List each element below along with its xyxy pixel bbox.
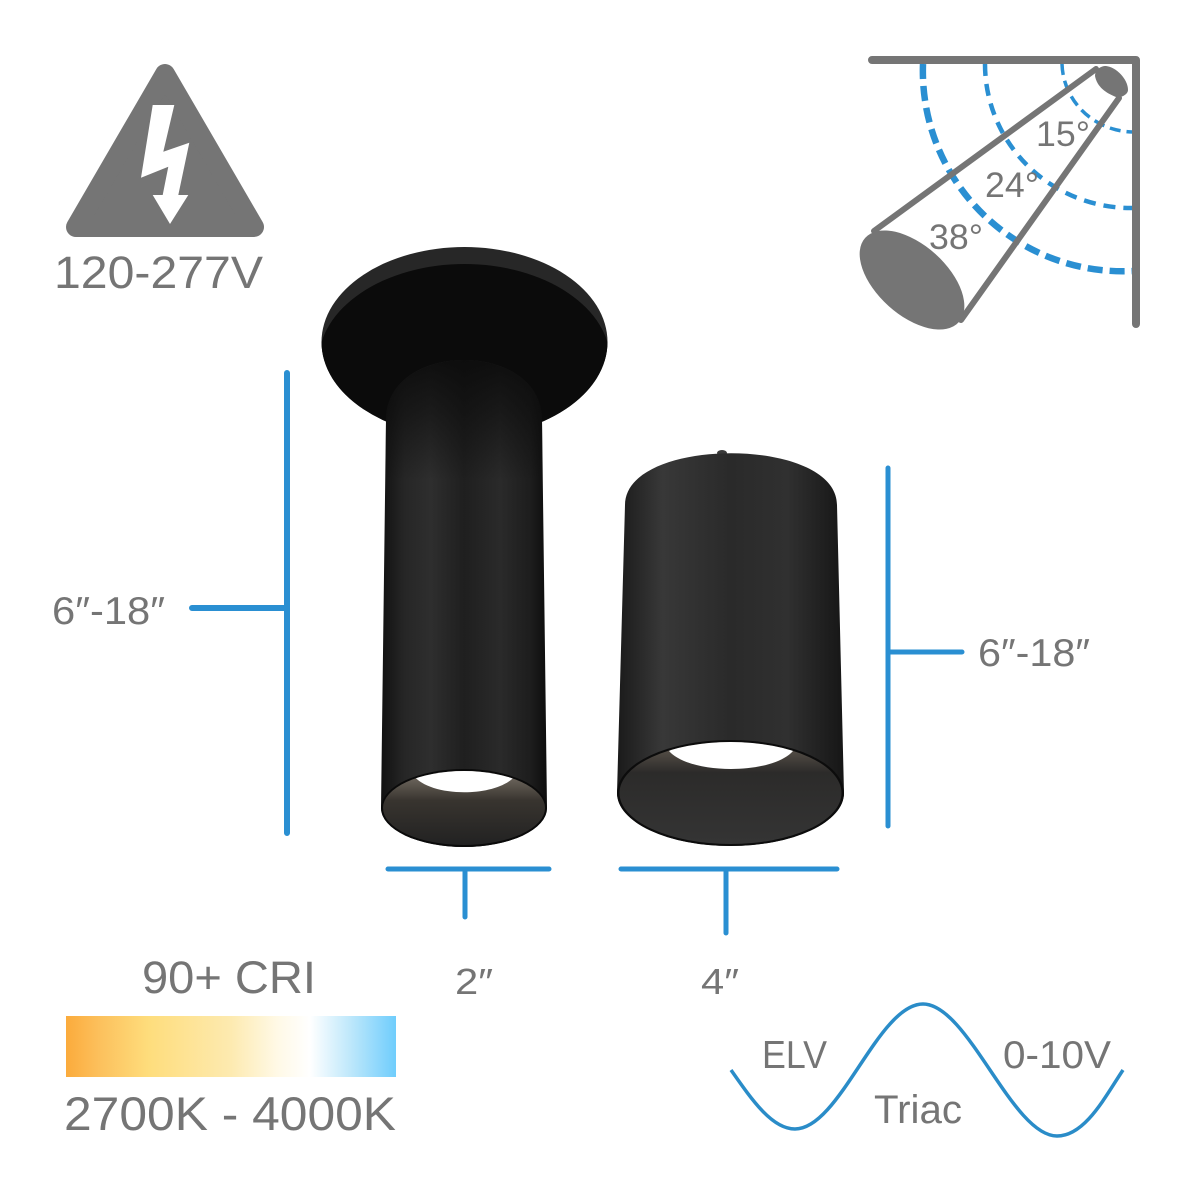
- voltage label: 120-277V: [54, 247, 263, 298]
- dashed arc: 24 degree: [985, 64, 1133, 208]
- bracket lines: [192, 373, 287, 833]
- mounting flange rim: [322, 247, 608, 437]
- dimension: left height: [52, 373, 287, 833]
- dashed arc: 15 degree: [1062, 64, 1133, 132]
- lamp head: [1095, 66, 1128, 97]
- opening rim: [617, 740, 844, 846]
- bracket lines: [621, 869, 837, 933]
- light cone outline: [874, 69, 1119, 320]
- product: wide cylinder: [617, 450, 844, 846]
- opening interior: [620, 742, 842, 844]
- dimension: narrow width: [388, 869, 549, 1002]
- bracket lines: [888, 468, 962, 826]
- sine wave: [731, 1004, 1123, 1136]
- width label: 2″: [455, 961, 493, 1002]
- cylinder body: [617, 453, 844, 846]
- opening interior: [383, 771, 545, 845]
- angle label 38: 38°: [929, 218, 983, 257]
- icon: lightning bolt arrow: [141, 105, 189, 224]
- width label: 4″: [701, 961, 739, 1002]
- 0-10V label: 0-10V: [1003, 1034, 1111, 1077]
- cylinder tube body: [381, 360, 547, 847]
- colour temperature gradient bar: [66, 1016, 396, 1077]
- beam end ellipse: [842, 212, 982, 348]
- CRI label: 90+ CRI: [142, 952, 316, 1003]
- white light source: [669, 740, 793, 769]
- bracket lines: [388, 869, 549, 917]
- dimension: wide width: [621, 869, 837, 1002]
- voltage panel: [54, 74, 263, 298]
- angle label 24: 24°: [985, 166, 1039, 205]
- white light source: [416, 771, 512, 792]
- panel: colour temperature: [64, 952, 396, 1140]
- product: narrow flush cylinder: [318, 247, 610, 847]
- mounting flange face: [322, 264, 608, 422]
- ELV label: ELV: [762, 1034, 827, 1077]
- Triac label: Triac: [874, 1088, 962, 1132]
- shadow at tube top: [384, 360, 544, 560]
- dimension: right height: [888, 468, 1090, 826]
- panel: beam angle diagram: [842, 60, 1136, 348]
- ceiling and wall corner: [872, 60, 1136, 324]
- colour temperature range label: 2700K - 4000K: [64, 1087, 396, 1140]
- panel: dimming compatibility: [731, 1004, 1123, 1136]
- opening rim: [381, 769, 547, 847]
- dashed arc: 38 degree: [923, 64, 1133, 271]
- mounting nub: [717, 450, 727, 456]
- height label: 6″-18″: [52, 590, 165, 633]
- height label: 6″-18″: [978, 632, 1090, 675]
- icon: high voltage triangle: [76, 74, 254, 227]
- angle label 15: 15°: [1036, 115, 1090, 154]
